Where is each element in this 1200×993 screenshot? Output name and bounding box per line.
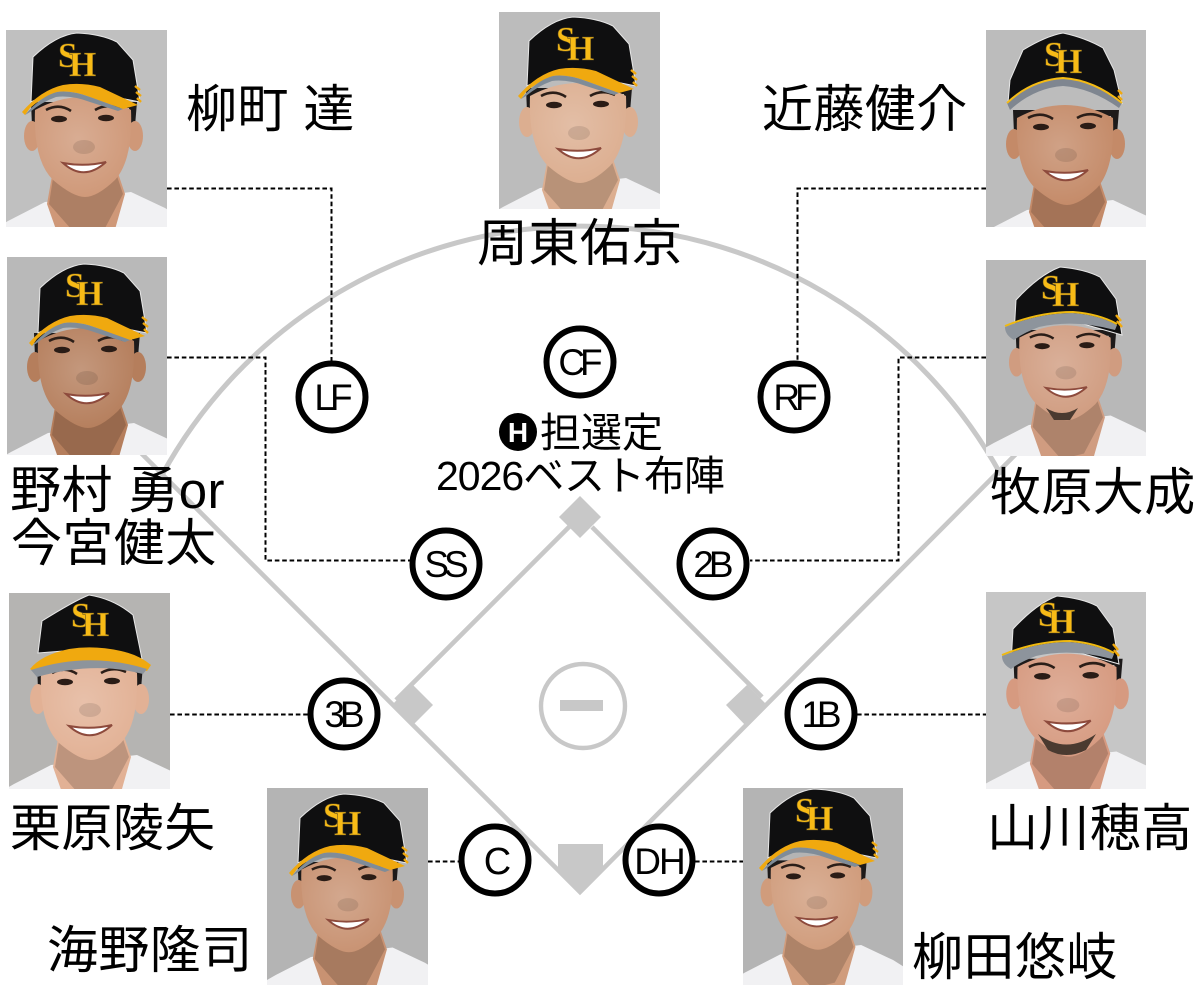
name: 周東佑京: 周東佑京 bbox=[477, 215, 683, 272]
position marker 2B: 2B bbox=[693, 544, 732, 585]
baseball field diagram bbox=[140, 226, 1018, 894]
photo: 周東佑京: S bbox=[556, 20, 575, 59]
position marker C: C bbox=[484, 841, 510, 883]
position marker SS: SS bbox=[424, 544, 467, 585]
position marker CF bbox=[546, 328, 614, 396]
position marker C bbox=[462, 826, 528, 894]
icon: H badge: H bbox=[508, 417, 528, 448]
position marker 3B: 3B bbox=[324, 694, 363, 735]
photo: 海野隆司 bbox=[267, 788, 428, 985]
photo: 野村 勇: H bbox=[76, 274, 103, 313]
photo: 山川穂高 bbox=[986, 592, 1146, 789]
position marker CF: CF bbox=[558, 342, 602, 383]
photo: 近藤健介: H bbox=[1055, 42, 1082, 81]
photo: 野村 勇 bbox=[7, 257, 167, 455]
home plate bbox=[558, 844, 603, 894]
photo: 山川穂高: S bbox=[1038, 595, 1057, 634]
infield lines bbox=[396, 525, 762, 700]
photo: 周東佑京 bbox=[499, 12, 660, 209]
photo: 柳田悠岐: S bbox=[795, 791, 814, 830]
photo: 牧原大成: H bbox=[1052, 275, 1079, 314]
photo: 柳町 達: S bbox=[58, 36, 77, 75]
photo: 柳町 達: H bbox=[69, 45, 96, 84]
photo: 柳田悠岐: H bbox=[806, 799, 833, 838]
pitcher mound bbox=[541, 664, 625, 748]
name: 野村 勇or 今宮健太: 野村 勇or bbox=[10, 462, 225, 519]
photo: 柳田悠岐 bbox=[743, 788, 903, 985]
third base bbox=[392, 684, 433, 726]
name: 柳田悠岐: 柳田悠岐 bbox=[912, 929, 1118, 986]
position marker 3B bbox=[310, 680, 378, 748]
photo: 栗原陵矢: S bbox=[71, 596, 90, 635]
connector lines bbox=[167, 188, 986, 862]
name: 野村 勇or 今宮健太 bbox=[10, 462, 225, 572]
second base bbox=[559, 496, 601, 538]
photo: 柳町 達 bbox=[6, 30, 167, 227]
name: 野村 勇or 今宮健太: 今宮健太 bbox=[11, 515, 217, 572]
name: 柳町 達: 柳町 達 bbox=[186, 81, 355, 138]
position marker 2B bbox=[680, 530, 746, 598]
photo: 周東佑京: H bbox=[567, 29, 594, 68]
name: 牧原大成: 牧原大成 bbox=[990, 464, 1196, 521]
photo: 栗原陵矢 bbox=[9, 593, 170, 789]
position marker RF bbox=[760, 364, 828, 430]
first base bbox=[726, 685, 767, 726]
position marker LF bbox=[298, 364, 366, 430]
position marker DH bbox=[626, 826, 692, 894]
position marker 1B bbox=[788, 680, 854, 748]
photo: 牧原大成: S bbox=[1041, 268, 1060, 307]
position marker DH: DH bbox=[634, 841, 684, 882]
photo: 野村 勇: S bbox=[65, 266, 84, 305]
photo: 海野隆司: S bbox=[323, 796, 342, 835]
outfield arc bbox=[162, 226, 1001, 475]
title: 担選定 2026ベスト布陣 bbox=[436, 410, 724, 499]
position marker LF: LF bbox=[314, 377, 352, 418]
name: 近藤健介: 近藤健介 bbox=[762, 81, 968, 138]
photo: 栗原陵矢: H bbox=[82, 605, 109, 644]
position marker 1B: 1B bbox=[801, 694, 840, 735]
photo: 近藤健介 bbox=[986, 30, 1146, 227]
photo: 山川穂高: H bbox=[1048, 602, 1075, 641]
title: 担選定 2026ベスト布陣: 担選定 bbox=[540, 410, 663, 456]
position marker RF: RF bbox=[773, 377, 817, 418]
icon: H badge bbox=[499, 413, 537, 451]
photo: 海野隆司: H bbox=[334, 804, 361, 843]
photo: 牧原大成 bbox=[986, 260, 1146, 456]
name: 海野隆司: 海野隆司 bbox=[47, 922, 253, 979]
foul lines bbox=[140, 452, 1018, 892]
photo: 近藤健介: S bbox=[1044, 35, 1063, 74]
position marker SS bbox=[412, 530, 480, 598]
name: 栗原陵矢: 栗原陵矢 bbox=[10, 800, 216, 857]
title: 担選定 2026ベスト布陣: 2026ベスト布陣 bbox=[436, 453, 724, 499]
name: 山川穂高: 山川穂高 bbox=[987, 800, 1193, 857]
